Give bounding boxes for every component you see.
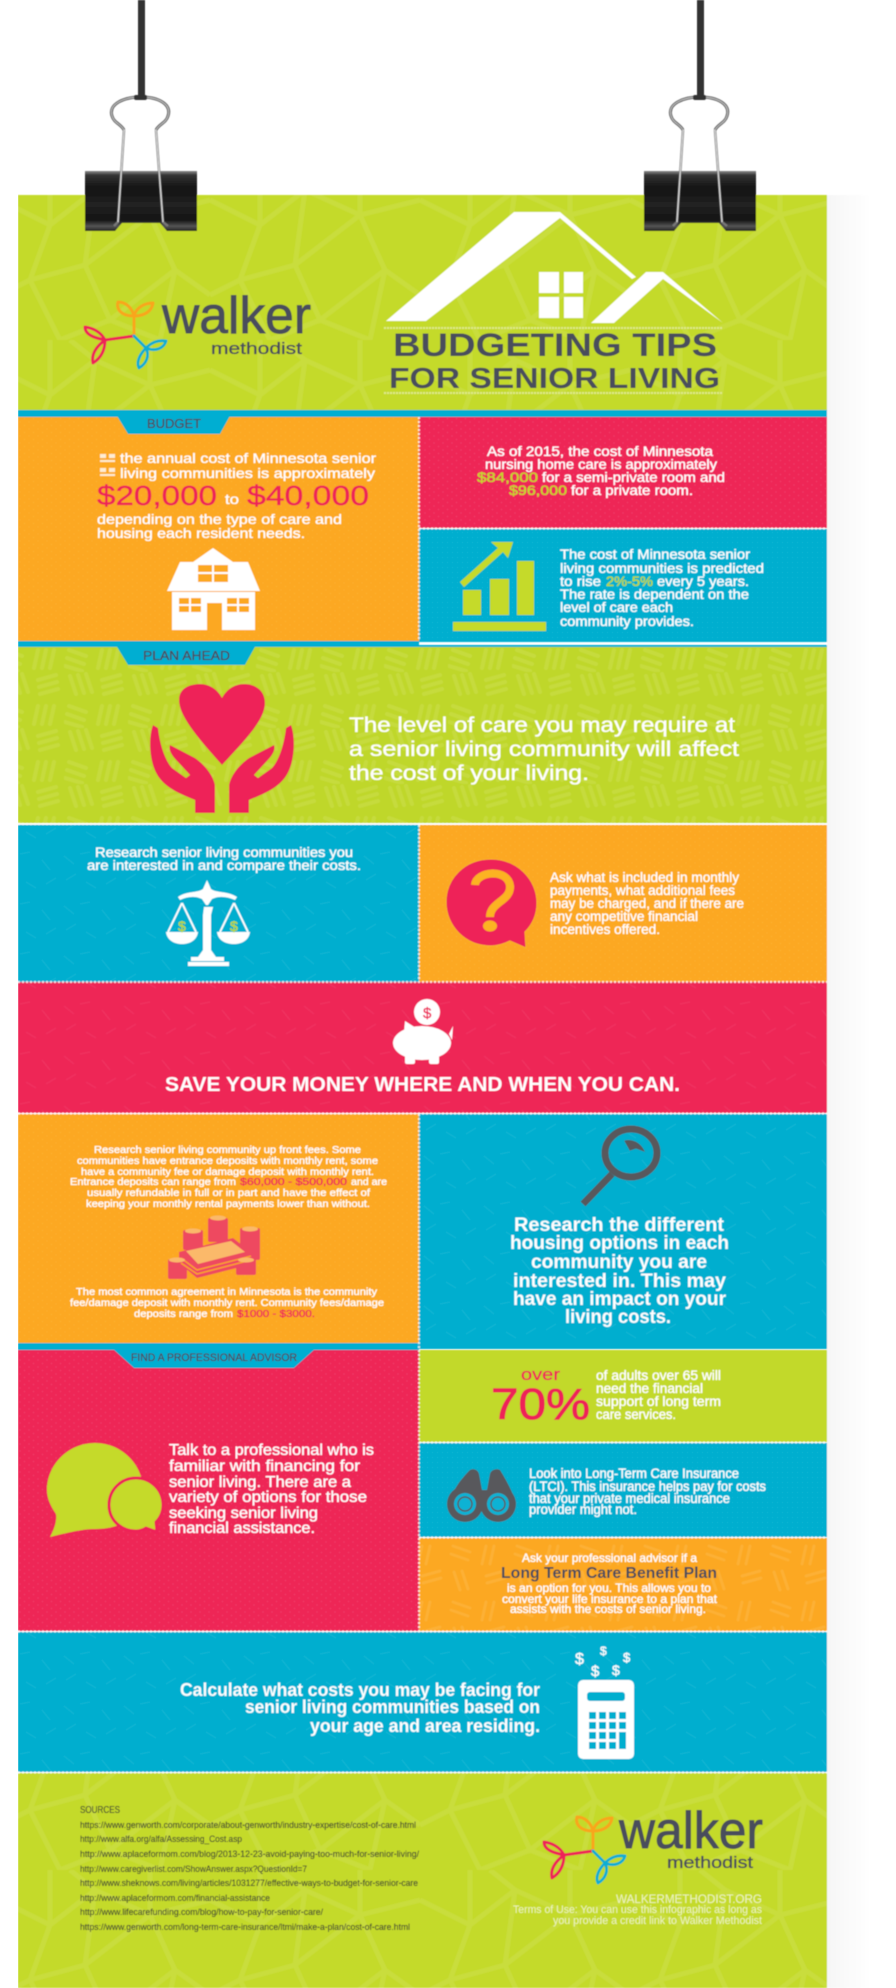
text: nursing home cost xyxy=(477,444,725,498)
text: ltci: (LTCI). This insurance helps pay for costs xyxy=(529,1479,766,1494)
binder clip left xyxy=(85,95,197,231)
text: ltci: Look into Long-Term Care Insurance xyxy=(529,1466,739,1481)
icon: heart in hands xyxy=(150,684,294,813)
text: research communities: Research senior living communities you xyxy=(95,845,353,860)
panel: plan ahead xyxy=(18,645,827,823)
text: nursing home cost: for a semi-private room and xyxy=(542,470,725,485)
text: benefit plan: is an option for you. This allows you to xyxy=(507,1581,711,1595)
text: nursing home cost: $84,000 xyxy=(477,470,538,485)
icon: scales: $ xyxy=(178,918,186,934)
text: common agreement: fee/damage deposit with monthly rent. Community fees/damage xyxy=(70,1297,384,1309)
icon: scales: $ xyxy=(230,918,238,934)
text: calculate costs: Calculate what costs you may be facing for xyxy=(180,1680,540,1700)
text: up front fees: and are xyxy=(351,1176,387,1188)
title xyxy=(384,327,723,395)
text: ltci xyxy=(529,1466,766,1517)
text: ask what is included: Ask what is included in monthly xyxy=(550,870,739,885)
panel: long-term care insurance xyxy=(419,1443,827,1537)
text: predicted rise: living communities is predicted xyxy=(560,561,764,576)
icon: calculator with dollar signs: $ xyxy=(612,1662,620,1678)
sources list: SOURCES xyxy=(80,1805,120,1816)
text: level of care xyxy=(349,714,739,785)
text: up front fees: keeping your monthly rental payments lower than without. xyxy=(86,1198,370,1210)
text: predicted rise: every 5 years. xyxy=(657,574,749,589)
text: up front fees: usually refundable in full or in part and have the effect of xyxy=(87,1187,370,1199)
title: BUDGETING TIPS xyxy=(393,327,717,363)
text: adults over 65: care services. xyxy=(596,1407,676,1422)
icon: binoculars xyxy=(447,1469,516,1522)
text: benefit plan: Ask your professional advisor if a xyxy=(522,1551,697,1565)
icon: money and coins xyxy=(168,1216,260,1279)
text: talk to a professional: senior living. There are a xyxy=(169,1474,351,1491)
poster shadow xyxy=(827,195,872,1988)
text: up front fees: $60,000 - $500,000 xyxy=(240,1176,347,1188)
tab: plan ahead xyxy=(117,647,255,665)
text: calculate costs: senior living communities based on xyxy=(245,1697,540,1717)
stat: over 70% xyxy=(491,1365,590,1429)
text: nursing home cost: $96,000 xyxy=(509,483,567,498)
text: annual cost: depending on the type of care and xyxy=(97,511,342,527)
sources list: http://www.caregiverlist.com/ShowAnswer.aspx?QuestionId=7 xyxy=(80,1864,307,1875)
tab: budget: BUDGET xyxy=(147,416,201,431)
text: predicted rise: to rise xyxy=(560,574,601,589)
panel: calculate costs xyxy=(18,1632,827,1772)
icon: piggy bank xyxy=(393,999,453,1064)
text: ltci: provider might not. xyxy=(529,1502,637,1517)
text: talk to a professional xyxy=(169,1442,374,1537)
logo: walker methodist xyxy=(85,287,311,368)
stat: over 70%: 70% xyxy=(491,1380,590,1429)
blue divider strip xyxy=(18,410,827,417)
text: nursing home cost: for a private room. xyxy=(571,483,693,498)
logo: walker methodist: walker xyxy=(161,287,311,345)
text: research housing options: living costs. xyxy=(565,1307,671,1328)
text: adults over 65 xyxy=(596,1368,721,1422)
icon: piggy bank: $ xyxy=(423,1005,432,1022)
text: annual cost: housing each resident needs. xyxy=(97,525,305,541)
text: adults over 65: of adults over 65 will xyxy=(596,1368,721,1383)
sources list: http://www.aplaceformom.com/blog/2013-12-23-avoid-paying-too-much-for-senior-living/ xyxy=(80,1849,419,1860)
text: predicted rise: 2%-5% xyxy=(606,574,653,589)
sources list: https://www.genworth.com/long-term-care-insurance/ltmi/make-a-plan/cost-of-care.html xyxy=(80,1922,410,1933)
panel: find a professional advisor xyxy=(18,1350,419,1631)
tab: plan ahead: PLAN AHEAD xyxy=(143,648,230,663)
text: annual cost: to xyxy=(225,491,239,507)
text: benefit plan: convert your life insurance to a plan that xyxy=(502,1592,718,1606)
icon: calculator with dollar signs: $ xyxy=(575,1651,584,1668)
text: research communities: are interested in and compare their costs. xyxy=(87,858,361,873)
text: ask what is included: any competitive financial xyxy=(550,909,698,924)
text: common agreement: deposits range from xyxy=(134,1308,233,1320)
text: level of care: The level of care you may require at xyxy=(349,714,735,737)
icon: scales xyxy=(166,880,250,966)
text: talk to a professional: Talk to a professional who is xyxy=(169,1442,374,1459)
sources list xyxy=(80,1805,419,1933)
icon: magnifying glass xyxy=(583,1129,657,1204)
sources list: http://www.aplaceformom.com/financial-assistance xyxy=(80,1893,270,1904)
sources list: http://www.alfa.org/alfa/Assessing_Cost.asp xyxy=(80,1834,242,1845)
text: adults over 65: need the financial xyxy=(596,1381,703,1396)
text: talk to a professional: variety of options for those xyxy=(169,1489,367,1506)
text: calculate costs: your age and area residing. xyxy=(310,1716,540,1736)
panel: save your money xyxy=(18,982,827,1113)
text: annual cost: $40,000 xyxy=(247,480,369,511)
sources list: http://www.lifecarefunding.com/blog/how-to-pay-for-senior-care/ xyxy=(80,1907,323,1918)
text: ltci: that your private medical insurance xyxy=(529,1491,730,1506)
text: up front fees: Research senior living community up front fees. Some xyxy=(94,1144,361,1156)
icon: calculator with dollar signs: $ xyxy=(623,1650,631,1665)
text: common agreement: $1000 - $3000. xyxy=(237,1308,315,1320)
text: research housing options: housing options in each xyxy=(510,1233,729,1254)
panel: predicted rise xyxy=(419,529,827,642)
text: common agreement: The most common agreement in Minnesota is the community xyxy=(76,1286,378,1298)
stat: over 70%: over xyxy=(521,1365,560,1384)
text: research housing options xyxy=(510,1215,729,1328)
icon: house xyxy=(167,548,260,630)
text: terms of use: Terms of Use: You can use this infographic as long as xyxy=(513,1904,762,1916)
panel: header xyxy=(18,195,827,410)
tab: find a professional advisor: FIND A PROFESSIONAL ADVISOR xyxy=(131,1352,297,1364)
text: benefit plan: Long Term Care Benefit Plan xyxy=(501,1565,717,1582)
binder clip right xyxy=(644,95,756,231)
icon: house roofs xyxy=(386,212,723,323)
text: talk to a professional: financial assistance. xyxy=(169,1520,315,1537)
text: up front fees: communities have entrance deposits with monthly rent, some xyxy=(77,1155,378,1167)
text: talk to a professional: seeking senior living xyxy=(169,1505,318,1522)
text: research communities xyxy=(87,845,361,873)
panel: nursing home cost xyxy=(419,417,827,528)
text: terms of use: you provide a credit link to Walker Methodist xyxy=(553,1915,762,1927)
panel: research housing options xyxy=(419,1114,827,1349)
text: predicted rise: level of care each xyxy=(560,600,673,615)
text: ask what is included: may be charged, and if there are xyxy=(550,896,744,911)
text: nursing home cost: As of 2015, the cost of Minnesota xyxy=(487,444,714,459)
logo: walker methodist footer: walker xyxy=(618,1802,763,1860)
icon: small people xyxy=(100,454,115,476)
text: research housing options: Research the different xyxy=(514,1215,725,1236)
panel: benefit plan xyxy=(419,1538,827,1631)
text: research housing options: have an impact on your xyxy=(513,1289,727,1310)
icon: rising bar chart xyxy=(453,542,546,631)
tab: budget xyxy=(117,416,230,434)
panel: 70 percent xyxy=(419,1350,827,1442)
text: annual cost: living communities is approximately xyxy=(120,465,375,481)
panel: research communities xyxy=(18,825,419,982)
dotted separators xyxy=(18,417,827,1772)
tab: find a professional advisor xyxy=(114,1350,314,1368)
icon: calculator with dollar signs: $ xyxy=(600,1644,607,1658)
icon: chat bubbles xyxy=(47,1443,163,1537)
logo: walker methodist footer xyxy=(544,1802,763,1883)
text: nursing home cost: nursing home care is approximately xyxy=(485,457,717,472)
text: terms of use: WALKERMETHODIST.ORG xyxy=(616,1892,762,1906)
text: research housing options: community you are xyxy=(531,1252,707,1273)
heading: save your money: SAVE YOUR MONEY WHERE AND WHEN YOU CAN. xyxy=(165,1074,680,1096)
text: level of care: a senior living community will affect xyxy=(349,738,739,761)
blue divider strip lower xyxy=(18,641,419,647)
text: predicted rise: community provides. xyxy=(560,614,694,629)
text: benefit plan: assists with the costs of senior living. xyxy=(510,1602,706,1616)
sources list: http://www.sheknows.com/living/articles/1031277/effective-ways-to-budget-for-senior-care xyxy=(80,1878,418,1889)
icon: calculator with dollar signs: $ xyxy=(591,1663,600,1680)
text: annual cost: $20,000 xyxy=(97,480,217,511)
panel: budget annual cost xyxy=(18,416,419,641)
icon: calculator with dollar signs xyxy=(575,1644,634,1759)
text: common agreement xyxy=(70,1286,384,1320)
text: up front fees: have a community fee or damage deposit with monthly rent. xyxy=(81,1166,374,1178)
text: level of care: the cost of your living. xyxy=(349,762,589,785)
text: benefit plan xyxy=(501,1551,718,1616)
text: annual cost: the annual cost of Minnesota senior xyxy=(120,450,376,466)
strings xyxy=(138,0,704,97)
sources list: https://www.genworth.com/corporate/about-genworth/industry-expertise/cost-of-care.html xyxy=(80,1820,416,1831)
text: predicted rise xyxy=(560,547,764,629)
logo: walker methodist footer: methodist xyxy=(667,1853,753,1872)
text: up front fees: Entrance deposits can range from xyxy=(70,1176,236,1188)
text: calculate costs xyxy=(180,1680,540,1736)
text: ask what is included: payments, what additional fees xyxy=(550,883,735,898)
logo: walker methodist: methodist xyxy=(211,339,302,358)
icon: question bubble xyxy=(446,859,537,948)
panel: footer xyxy=(18,1773,827,1988)
text: adults over 65: support of long term xyxy=(596,1394,721,1409)
text: talk to a professional: familiar with financing for xyxy=(169,1458,361,1475)
text: predicted rise: The cost of Minnesota senior xyxy=(560,547,751,562)
blue divider strip advisor xyxy=(18,1343,419,1350)
panel: up front fees xyxy=(18,1114,419,1343)
text: ask what is included xyxy=(550,870,744,937)
title: FOR SENIOR LIVING xyxy=(389,363,720,395)
panel: ask what is included xyxy=(419,825,827,982)
text: research housing options: interested in. This may xyxy=(513,1271,726,1292)
text: annual cost xyxy=(97,450,376,541)
text: terms of use xyxy=(513,1892,762,1927)
text: predicted rise: The rate is dependent on the xyxy=(560,587,749,602)
text: up front fees xyxy=(70,1144,387,1210)
text: ask what is included: incentives offered. xyxy=(550,922,660,937)
